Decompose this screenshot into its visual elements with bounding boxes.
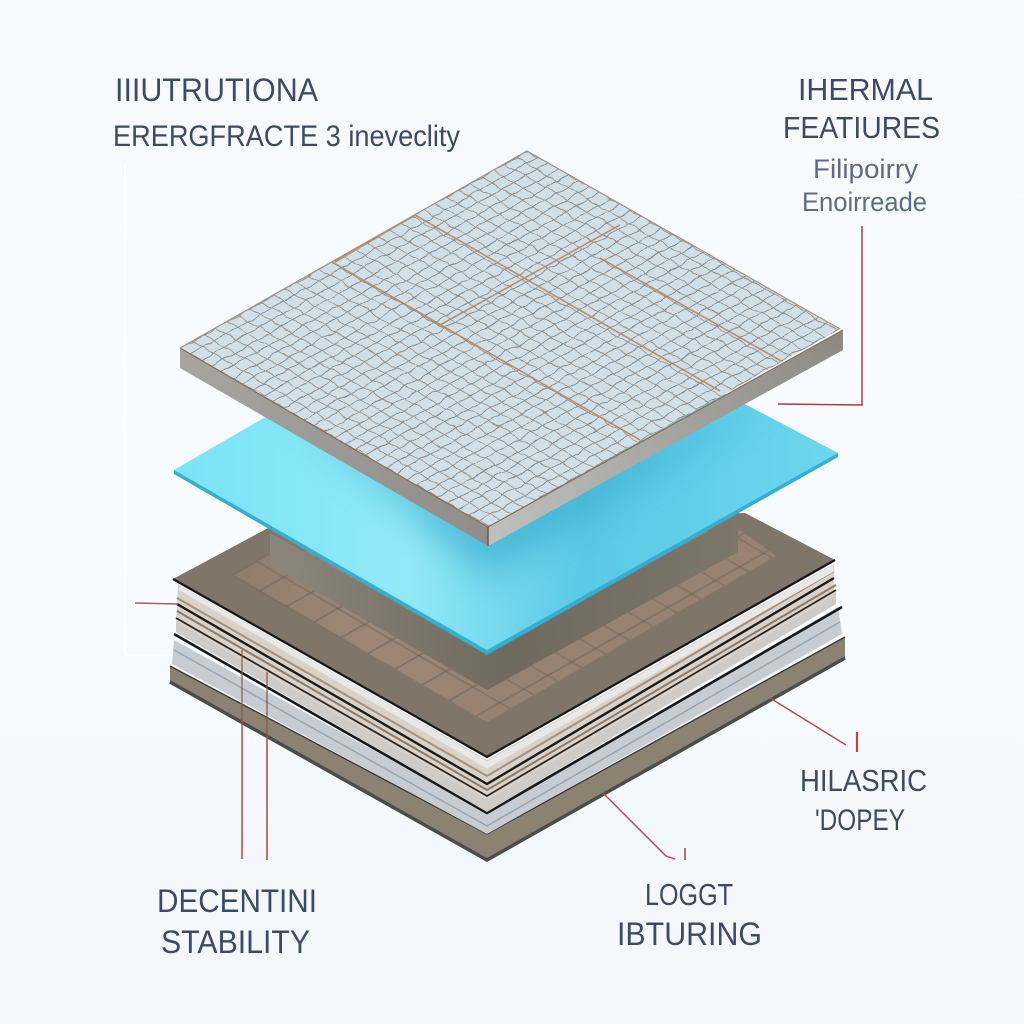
label: thermal features: IHERMAL [798,72,933,107]
raised wall under cyan sheet [270,515,738,690]
label: decentini stability [157,883,317,960]
leader line: left short [135,603,178,604]
heading: top left label [113,72,460,153]
leader line: logot [603,793,685,860]
label: thermal features: Filipoirry [813,154,919,184]
heading: top left label: ERERGFRACTE 3 ineveclity [113,120,460,153]
sheet top surface with grid [170,140,850,540]
label: logot ibturing [617,877,762,952]
heading: top left label: IIIUTRUTIONA [115,72,319,108]
label: decentini stability: STABILITY [161,924,310,960]
bottom layered stack [170,513,845,860]
base plate [170,637,845,860]
leader line: hilasric dopey [770,698,857,752]
sheet right face [488,330,843,546]
sheet left face [180,348,488,546]
label: decentini stability: DECENTINI [157,883,317,919]
label: hilasric dopey [800,763,927,837]
label: logot ibturing: IBTURING [617,916,762,952]
paper and mineral layers [176,564,836,800]
brown top plate [173,513,835,757]
label: hilasric dopey: HILASRIC [800,763,927,798]
label: thermal features: Enoirreade [802,187,927,217]
label: logot ibturing: LOGGT [645,877,733,912]
cyan membrane sheet [174,394,838,655]
label: thermal features [783,72,940,217]
top textured sheet [170,140,850,546]
brick inset [232,530,776,722]
leader line: left white bracket [125,165,178,655]
label: hilasric dopey: 'DOPEY [815,804,905,837]
leader lines: decentini stability [242,650,267,860]
leader line: thermal features [778,226,862,405]
grey insulation layers [172,590,842,834]
label: thermal features: FEATIURES [783,110,940,145]
